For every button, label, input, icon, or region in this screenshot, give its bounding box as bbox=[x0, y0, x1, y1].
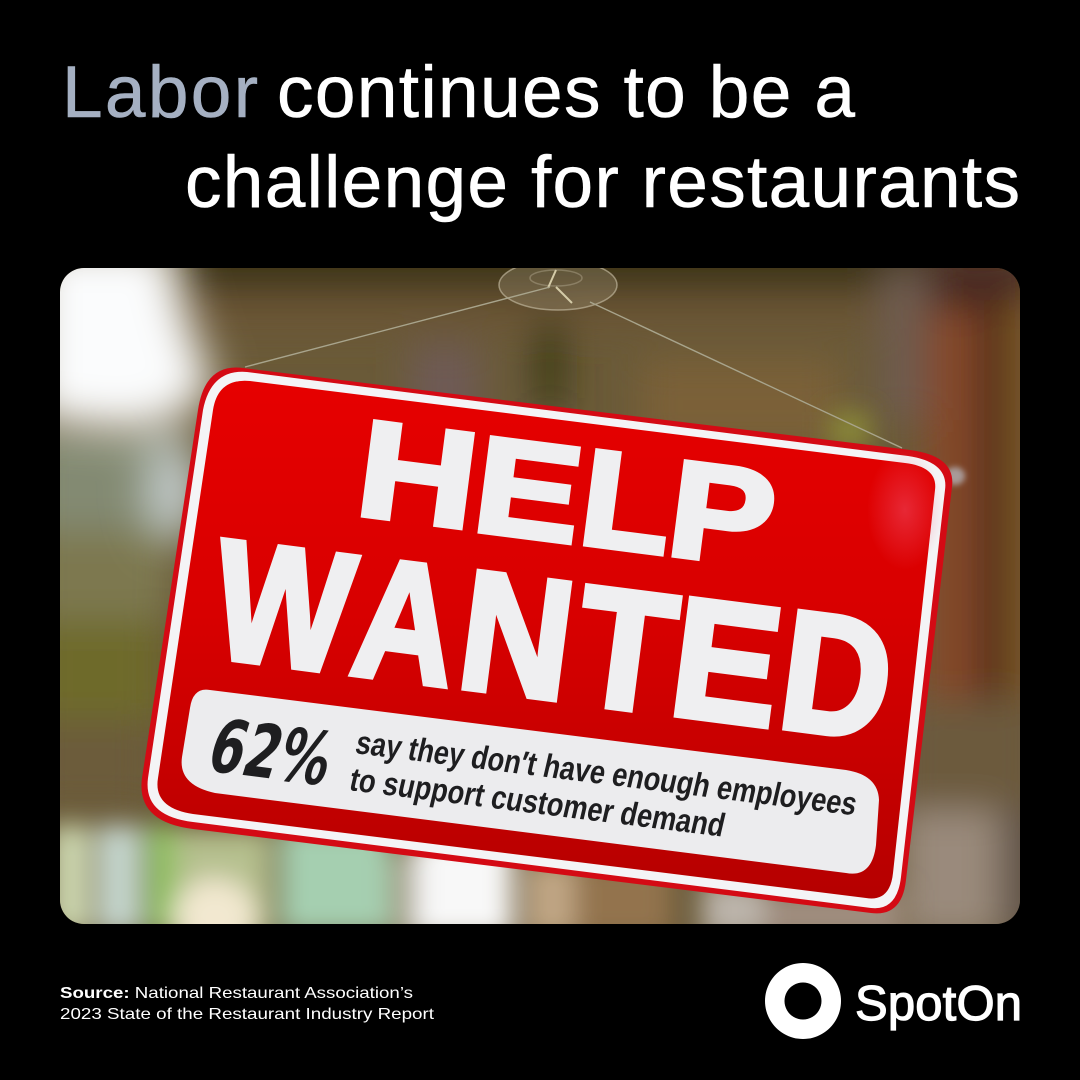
sign heading: HELP: H bbox=[349, 392, 486, 559]
source note: 2023 State of the Restaurant Industry Report bbox=[60, 1006, 435, 1023]
sign heading: HELP: P bbox=[660, 432, 784, 597]
sign heading: WANTED: E bbox=[661, 562, 792, 764]
sign heading: WANTED bbox=[203, 505, 903, 777]
source note: Source: National Restaurant Association’s bbox=[60, 985, 413, 1002]
sign heading: WANTED: T bbox=[566, 550, 686, 750]
sign heading: HELP bbox=[349, 392, 784, 597]
title: continues to be a bbox=[277, 52, 855, 133]
icon: suction cup bbox=[498, 268, 618, 311]
logo: SpotOn: SpotOn bbox=[855, 977, 1022, 1031]
title: challenge for restaurants bbox=[185, 142, 1020, 223]
statistic: 62%: 62% bbox=[199, 704, 344, 803]
photo panel: blurred storefront behind glass bbox=[60, 268, 1020, 924]
statistic caption: say they don′t have enough employees bbox=[352, 725, 861, 823]
sign heading: WANTED: N bbox=[449, 535, 584, 737]
statistic caption: to support customer demand bbox=[346, 762, 729, 844]
sign heading: WANTED: D bbox=[770, 575, 903, 777]
hanging strings bbox=[245, 287, 902, 448]
title: Labor bbox=[62, 52, 258, 133]
source note bbox=[60, 985, 435, 1023]
sign heading: HELP: E bbox=[466, 408, 591, 573]
logo: SpotOn bbox=[765, 963, 1022, 1039]
statistic pill bbox=[182, 690, 879, 874]
help wanted sign bbox=[141, 368, 952, 913]
sign heading: HELP: L bbox=[572, 421, 681, 584]
title bbox=[62, 52, 1020, 223]
sign heading: WANTED: W bbox=[203, 505, 364, 710]
sign heading: WANTED: A bbox=[343, 522, 468, 723]
